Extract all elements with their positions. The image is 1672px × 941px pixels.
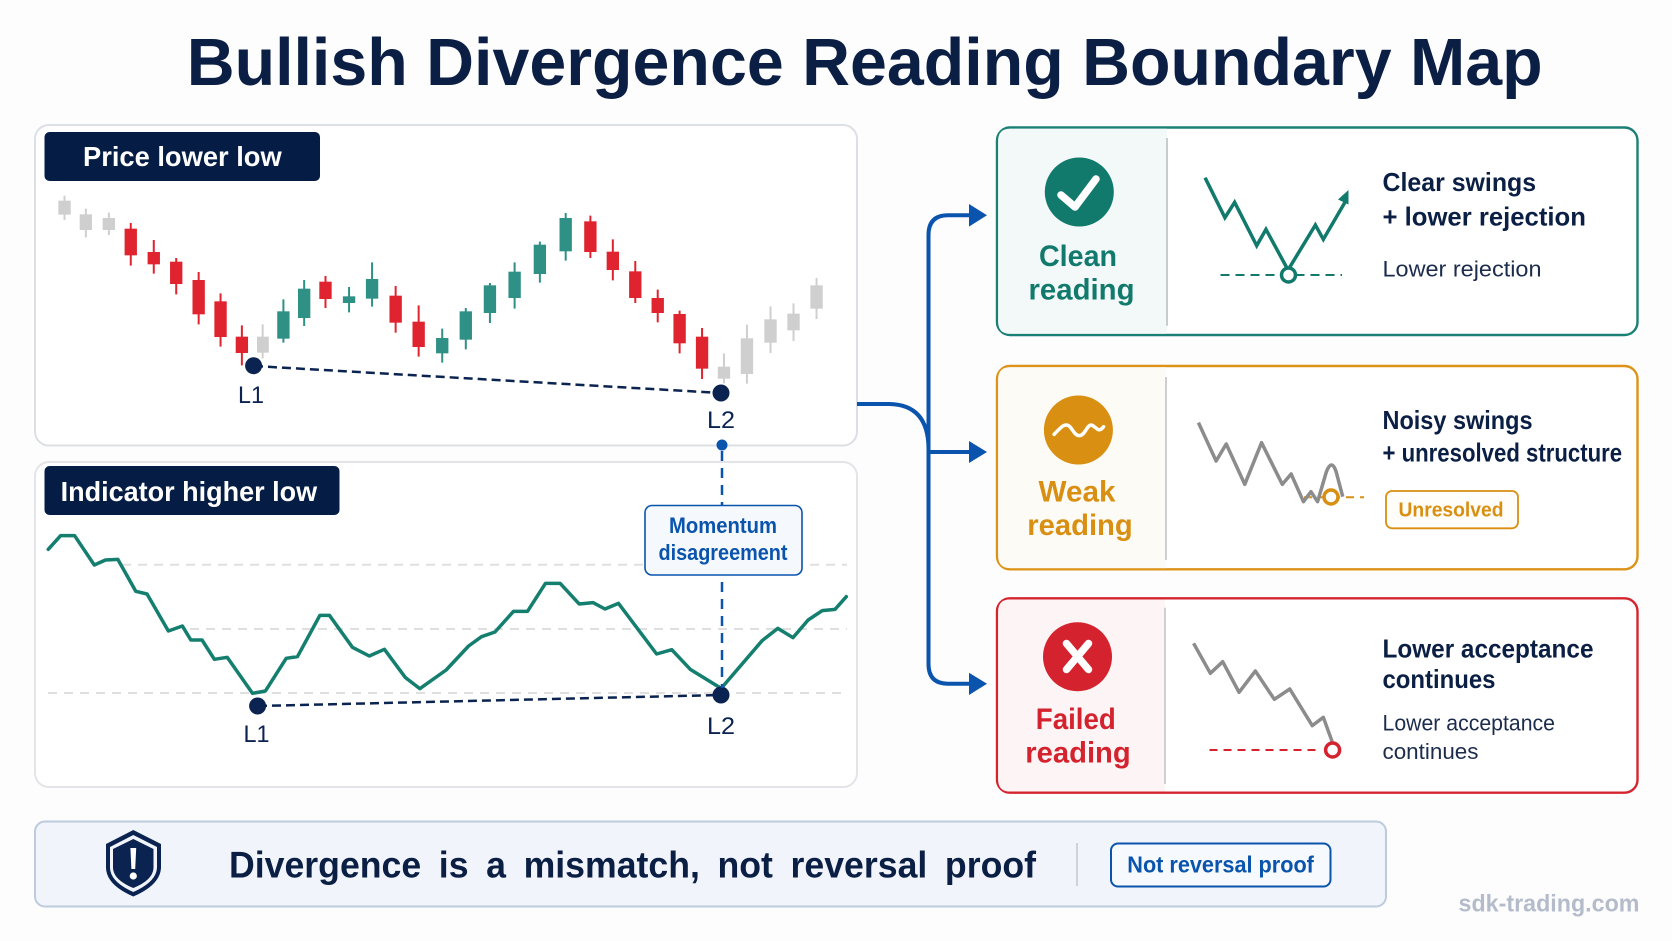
indicator lows trendline L1 to L2 [244,686,735,748]
icon: warning shield [106,830,161,896]
candlestick chart [58,196,823,384]
icon: cross [1043,622,1112,691]
text: failed reading description: continues [1382,664,1496,694]
text: failed reading description: continues [1382,739,1478,764]
text: failed reading description: Lower acceptance [1382,711,1555,736]
label: weak reading [1027,476,1133,542]
label: clean reading [1028,240,1134,306]
label: clean reading: reading [1028,273,1134,306]
arrow: to clean reading [969,204,987,227]
arrow: to failed reading [969,673,987,695]
tag: unresolved [1386,491,1518,528]
price lows trendline L1 to L2 [238,357,735,434]
text: clean reading description: Clear swings [1382,167,1536,197]
title: Bullish Divergence Reading Boundary Map [187,25,1543,100]
vertical link between L2 points [721,451,723,688]
heading: price lower low [44,132,320,181]
mini chart: unresolved structure [1198,423,1364,504]
panel: price lower low [35,125,857,446]
text: weak reading description: + unresolved structure [1382,438,1622,468]
text: clean reading description [1382,167,1586,282]
icon: wave [1044,396,1113,464]
tag: not reversal proof: Not reversal proof [1127,852,1314,878]
callout: momentum disagreement [645,506,802,575]
indicator lows trendline L1 to L2: L1 [244,721,270,748]
indicator lows trendline L1 to L2: L2 [707,713,735,740]
label: clean reading: Clean [1039,240,1117,273]
banner: key takeaway [35,822,1386,906]
price lows trendline L1 to L2: L1 [238,382,264,409]
callout: momentum disagreement: Momentum [669,513,777,538]
text: failed reading description [1382,633,1594,764]
text: weak reading description [1382,405,1622,468]
heading: indicator higher low: Indicator higher low [61,476,317,507]
link dot [716,440,728,450]
mini chart: lower acceptance [1194,643,1340,757]
icon: check mark [1045,158,1114,226]
tag: unresolved: Unresolved [1398,499,1504,522]
watermark: sdk-trading.com [1458,891,1640,918]
heading: indicator higher low [44,466,340,515]
panel: clean reading [997,128,1638,335]
panel: weak reading [997,366,1638,569]
label: failed reading: Failed [1036,703,1116,736]
arrow connector: branching to three readings [857,204,987,695]
label: weak reading: Weak [1038,476,1116,509]
text: failed reading description: Lower acceptance [1382,633,1594,663]
label: weak reading: reading [1027,509,1133,542]
label: failed reading: reading [1025,737,1131,770]
text: clean reading description: Lower rejection [1382,257,1542,282]
callout: momentum disagreement: disagreement [658,540,788,565]
heading: price lower low: Price lower low [83,141,282,172]
mini chart: lower rejection [1205,178,1348,282]
indicator line [48,536,846,693]
price lows trendline L1 to L2: L2 [707,407,735,434]
label: failed reading [1025,703,1131,770]
arrow: to weak reading [969,441,987,463]
tag: not reversal proof [1111,844,1330,886]
text: divergence statement: Divergence is a mismatch, not reversal proof [229,844,1037,885]
panel: indicator higher low [35,462,857,787]
text: clean reading description: + lower rejection [1382,202,1586,232]
panel: failed reading [997,598,1638,793]
text: weak reading description: Noisy swings [1382,405,1532,435]
